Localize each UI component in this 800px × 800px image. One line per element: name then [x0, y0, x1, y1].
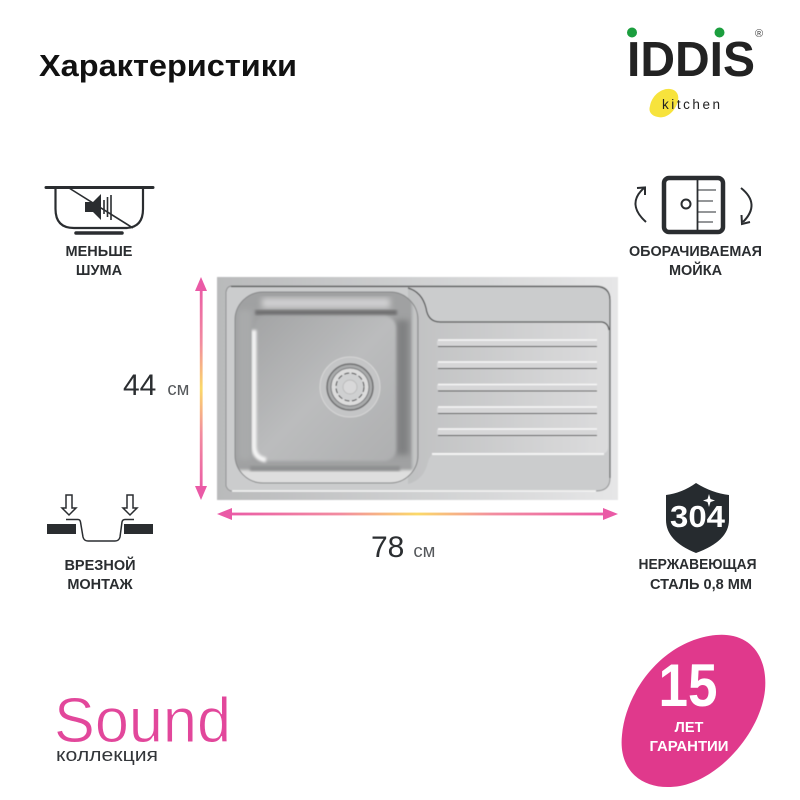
- title: Характеристики: [39, 48, 297, 83]
- label: stainless steel: СТАЛЬ 0,8 ММ: [650, 577, 752, 593]
- label: reversible sink: [629, 244, 762, 279]
- logo: iddis kitchen: kitchen: [662, 97, 720, 112]
- icon: reversible sink: [635, 178, 752, 232]
- bowl: [235, 292, 418, 484]
- arrow: height: [195, 277, 207, 500]
- warranty badge: [622, 635, 765, 787]
- logo: iddis kitchen: IDDIS: [627, 33, 755, 87]
- label: flush mount: ВРЕЗНОЙ: [64, 556, 136, 574]
- dimension: width 78 cm: 78 см: [371, 531, 435, 564]
- sink plate: [217, 277, 618, 500]
- warranty badge: 15: [658, 652, 718, 719]
- label: reversible sink: МОЙКА: [669, 261, 723, 279]
- sink image: [217, 277, 618, 500]
- label: reversible sink: ОБОРАЧИВАЕМАЯ: [629, 244, 762, 260]
- label: less noise: ШУМА: [76, 263, 123, 279]
- icon: less noise: [46, 188, 153, 233]
- drain: [320, 357, 380, 417]
- drainboard: [408, 288, 608, 484]
- icon: 304 steel shield: [666, 483, 729, 553]
- icon: 304 steel shield: 304: [670, 499, 726, 534]
- label: flush mount: МОНТАЖ: [67, 577, 134, 593]
- logo: iddis kitchen: [627, 28, 763, 117]
- collection name: коллекция: [56, 744, 158, 765]
- dimension: height 44 cm: 44 см: [123, 369, 189, 402]
- label: less noise: [66, 244, 133, 279]
- icon: flush mount: [47, 495, 153, 541]
- label: flush mount: [64, 556, 136, 593]
- sink rim: [226, 286, 610, 491]
- collection name: Sound: [54, 686, 231, 756]
- drain grooves: [437, 340, 597, 436]
- label: stainless steel: [638, 557, 756, 593]
- warranty badge: ЛЕТ: [675, 720, 703, 736]
- warranty badge: ГАРАНТИИ: [650, 739, 728, 755]
- logo: iddis kitchen: ®: [755, 28, 763, 40]
- label: less noise: МЕНЬШЕ: [66, 244, 133, 260]
- arrow: width: [217, 508, 618, 520]
- label: stainless steel: НЕРЖАВЕЮЩАЯ: [638, 557, 756, 573]
